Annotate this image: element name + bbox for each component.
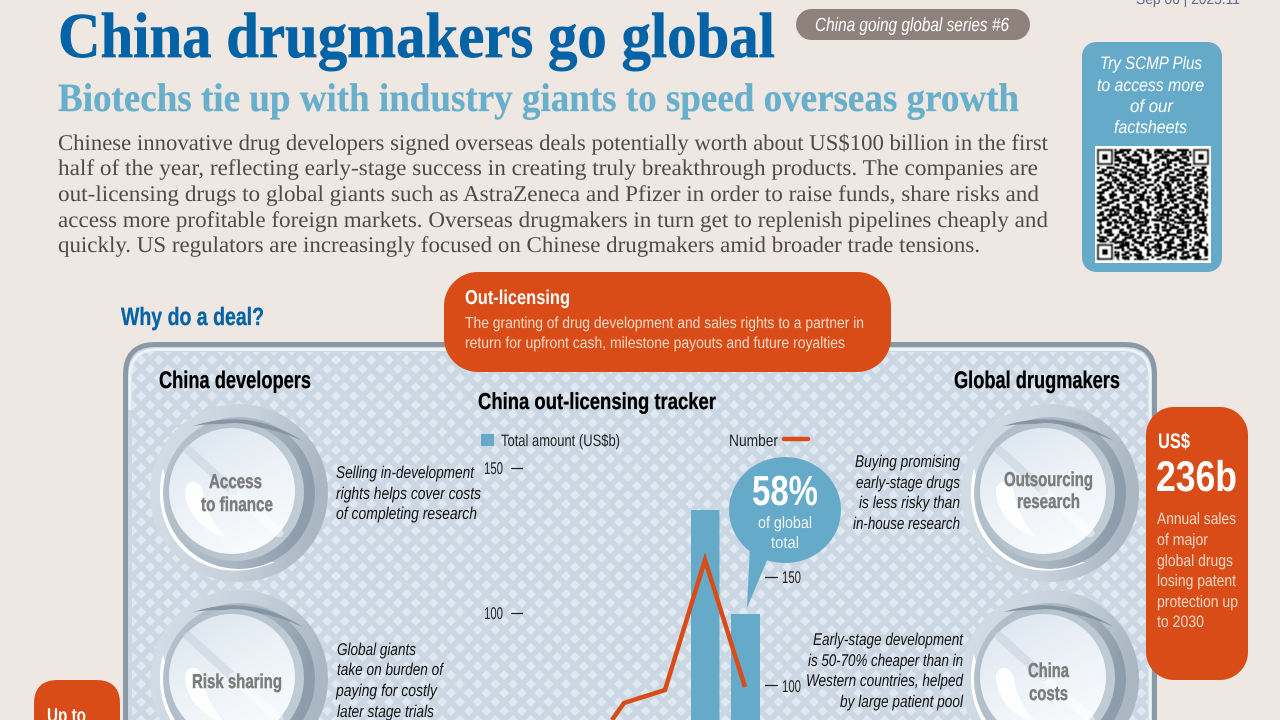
panel: out-licensing definition: The granting of drug development and sales rights to a partner in	[465, 315, 864, 332]
callout: 58% of global total: 58%	[752, 467, 818, 514]
subtitle: Biotechs tie up with industry giants to speed overseas growth	[58, 75, 1019, 120]
legend: Number	[729, 432, 778, 450]
right axis: 100	[782, 677, 801, 696]
pill: risk sharing: Risk sharing	[192, 671, 282, 693]
text: access to finance note: Selling in-development	[336, 463, 475, 482]
line: number of deals	[612, 560, 745, 720]
pill: outsourcing research	[961, 404, 1139, 582]
panel: out-licensing definition	[444, 272, 891, 372]
text: China costs note	[806, 630, 964, 711]
panel: SCMP Plus QR card: Try SCMP Plus	[1100, 53, 1202, 73]
callout: US$236b	[1146, 407, 1248, 680]
left axis	[484, 459, 523, 623]
panel: SCMP Plus QR card	[1082, 42, 1222, 272]
pill: risk sharing	[150, 590, 328, 720]
callout: US$236b: global drugs	[1157, 552, 1233, 570]
callout: US$236b: US$	[1158, 430, 1190, 453]
panel: out-licensing definition: return for upfront cash, milestone payouts and future royalties	[465, 335, 845, 352]
text: access to finance note: rights helps cover costs	[336, 484, 481, 503]
callout: 58% of global total: of global	[758, 514, 812, 532]
text: risk sharing note: take on burden of	[337, 660, 445, 679]
callout: up to (cropped)	[34, 680, 120, 720]
panel: out-licensing definition: Out-licensing	[465, 287, 570, 309]
chart title: China out-licensing tracker	[478, 388, 716, 414]
panel: blister pack	[126, 344, 1154, 720]
callout: US$236b: to 2030	[1157, 613, 1204, 631]
callout: US$236b: Annual sales	[1157, 510, 1236, 528]
icon: QR code	[1095, 146, 1211, 263]
text: access to finance note: of completing research	[336, 504, 477, 523]
text: outsourcing note: early-stage drugs	[856, 473, 960, 492]
intro text: quickly. US regulators are increasingly focused on Chinese drugmakers amid broader trade tensions.	[58, 232, 980, 257]
text: risk sharing note: paying for costly	[335, 681, 438, 700]
panel: SCMP Plus QR card: to access more	[1097, 75, 1204, 95]
intro text: access more profitable foreign markets. Overseas drugmakers in turn get to replenish pipelines cheaply and	[58, 207, 1048, 232]
text: China costs note: by large patient pool	[840, 692, 964, 711]
text: China costs note: Western countries, helped	[806, 671, 963, 690]
text: outsourcing note: Buying promising	[855, 452, 960, 471]
pill: access to finance	[150, 404, 328, 582]
text: China costs note: Early-stage development	[813, 630, 964, 649]
callout: 58% of global total	[729, 457, 841, 608]
text: outsourcing note	[853, 452, 960, 533]
pill: China costs: costs	[1029, 683, 1068, 705]
pill: outsourcing research: Outsourcing	[1004, 469, 1093, 491]
intro text: out-licensing drugs to global giants such as AstraZeneca and Pfizer in order to raise funds, share risks and	[58, 181, 1039, 206]
callout: US$236b: losing patent	[1157, 572, 1236, 590]
series tag: China going global series #6	[815, 15, 1009, 36]
legend	[481, 432, 808, 450]
callout: US$236b: protection up	[1157, 593, 1238, 611]
panel: SCMP Plus QR card: of our	[1130, 96, 1174, 116]
pill: access to finance: Access	[209, 471, 262, 493]
intro text: Chinese innovative drug developers signed overseas deals potentially worth about US$100 billion in the first	[58, 130, 1049, 155]
intro text	[58, 130, 1049, 257]
right axis	[765, 568, 801, 696]
bars	[691, 510, 760, 720]
pill: access to finance: to finance	[201, 494, 273, 516]
text: outsourcing note: is less risky than	[859, 493, 960, 512]
text: China costs note: is 50-70% cheaper than in	[808, 651, 963, 670]
text: risk sharing note: Global giants	[337, 640, 416, 659]
text: risk sharing note	[335, 640, 445, 720]
pill: China costs: China	[1028, 660, 1070, 682]
left axis: 100	[484, 604, 503, 623]
pill: outsourcing research: research	[1017, 491, 1080, 513]
text: access to finance note	[336, 463, 481, 523]
pill: China costs	[961, 590, 1139, 720]
legend: Total amount (US$b)	[501, 432, 620, 450]
text: outsourcing note: in-house research	[853, 514, 960, 533]
title: China drugmakers go global	[58, 0, 775, 72]
right axis: 150	[782, 568, 801, 587]
heading: why do a deal: Why do a deal?	[121, 303, 264, 331]
chart: China out-licensing tracker	[478, 388, 841, 720]
callout: US$236b: of major	[1157, 531, 1208, 549]
heading: China developers: China developers	[159, 367, 311, 394]
intro text: half of the year, reflecting early-stage success in creating truly breakthrough products. The companies are	[58, 155, 1038, 180]
panel: SCMP Plus QR card: factsheets	[1114, 117, 1187, 137]
heading: Global drugmakers: Global drugmakers	[954, 367, 1120, 394]
left axis: 150	[484, 459, 503, 478]
callout: US$236b: 236b	[1156, 453, 1237, 501]
callout: 58% of global total: total	[771, 534, 799, 552]
series tag	[796, 9, 1030, 40]
